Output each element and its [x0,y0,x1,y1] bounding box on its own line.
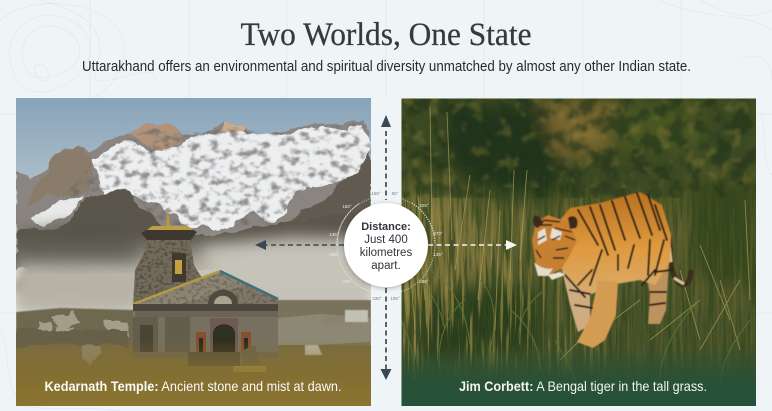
compass degree labels: 135° [329,232,339,237]
tiger stripes [565,193,672,308]
compass degree labels: 105° [390,296,400,301]
door [210,318,238,352]
tall grass [405,106,750,360]
cornice [133,304,278,311]
tiger front leg [577,280,618,348]
distance callout: Distance: [361,221,411,233]
dark slopes [284,151,371,223]
distance callout [344,203,428,287]
compass degree labels: 135° [433,252,443,257]
compass degree labels: 345° [329,252,339,257]
temple spire [166,208,170,226]
title: Two Worlds, One State [240,17,532,53]
golden fade [16,340,371,406]
compass degree labels: 150° [342,204,352,209]
grass streak texture [402,176,756,356]
leaf texture [401,98,756,198]
tiger far legs [562,270,590,332]
compass degree labels: 330° [372,296,382,301]
dotted compass ring [337,196,435,294]
hall [133,275,278,317]
compass degree labels: 90° [392,191,399,196]
arrow: west to Kedarnath [255,240,344,250]
compass degree labels: 225° [419,203,429,208]
arrow: east to Jim Corbett [428,240,517,250]
tiger tail [669,236,691,285]
green fade [401,345,756,406]
tower body [133,240,202,306]
subtitle: Uttarakhand offers an environmental and spiritual diversity unmatched by almost any other Indian state. [82,59,691,75]
distance callout: Just 400 [364,234,408,246]
distance callout: apart. [371,260,401,272]
caption: Kedarnath Temple: Kedarnath Temple: Ancient stone and mist at dawn. [44,378,342,394]
tiger head [532,215,577,276]
compass degree labels: 165° [371,191,381,196]
compass degree labels: 285° [419,279,429,284]
hall roof [133,271,220,304]
arrow: south [380,288,392,380]
compass degree labels [329,191,443,301]
panel: Kedarnath Temple photo [16,98,371,408]
distance callout: kilometres [360,247,412,259]
panel: Jim Corbett photo [401,98,756,406]
mist [16,238,371,313]
snow mountain range [16,120,371,236]
arrow: north [381,115,391,200]
sky [16,98,371,258]
rock texture on snow [69,123,371,225]
compass degree labels: 315° [342,279,352,284]
tiger body [552,192,671,295]
compass degree labels: 270° [433,231,443,236]
temple [130,208,280,372]
tiger [532,192,691,348]
pillars [133,317,190,355]
ground and boulders [16,308,133,345]
tower roof [141,229,197,241]
foliage background [401,98,756,406]
caption: Jim Corbett: Jim Corbett: A Bengal tiger in the tall grass. [459,378,707,394]
